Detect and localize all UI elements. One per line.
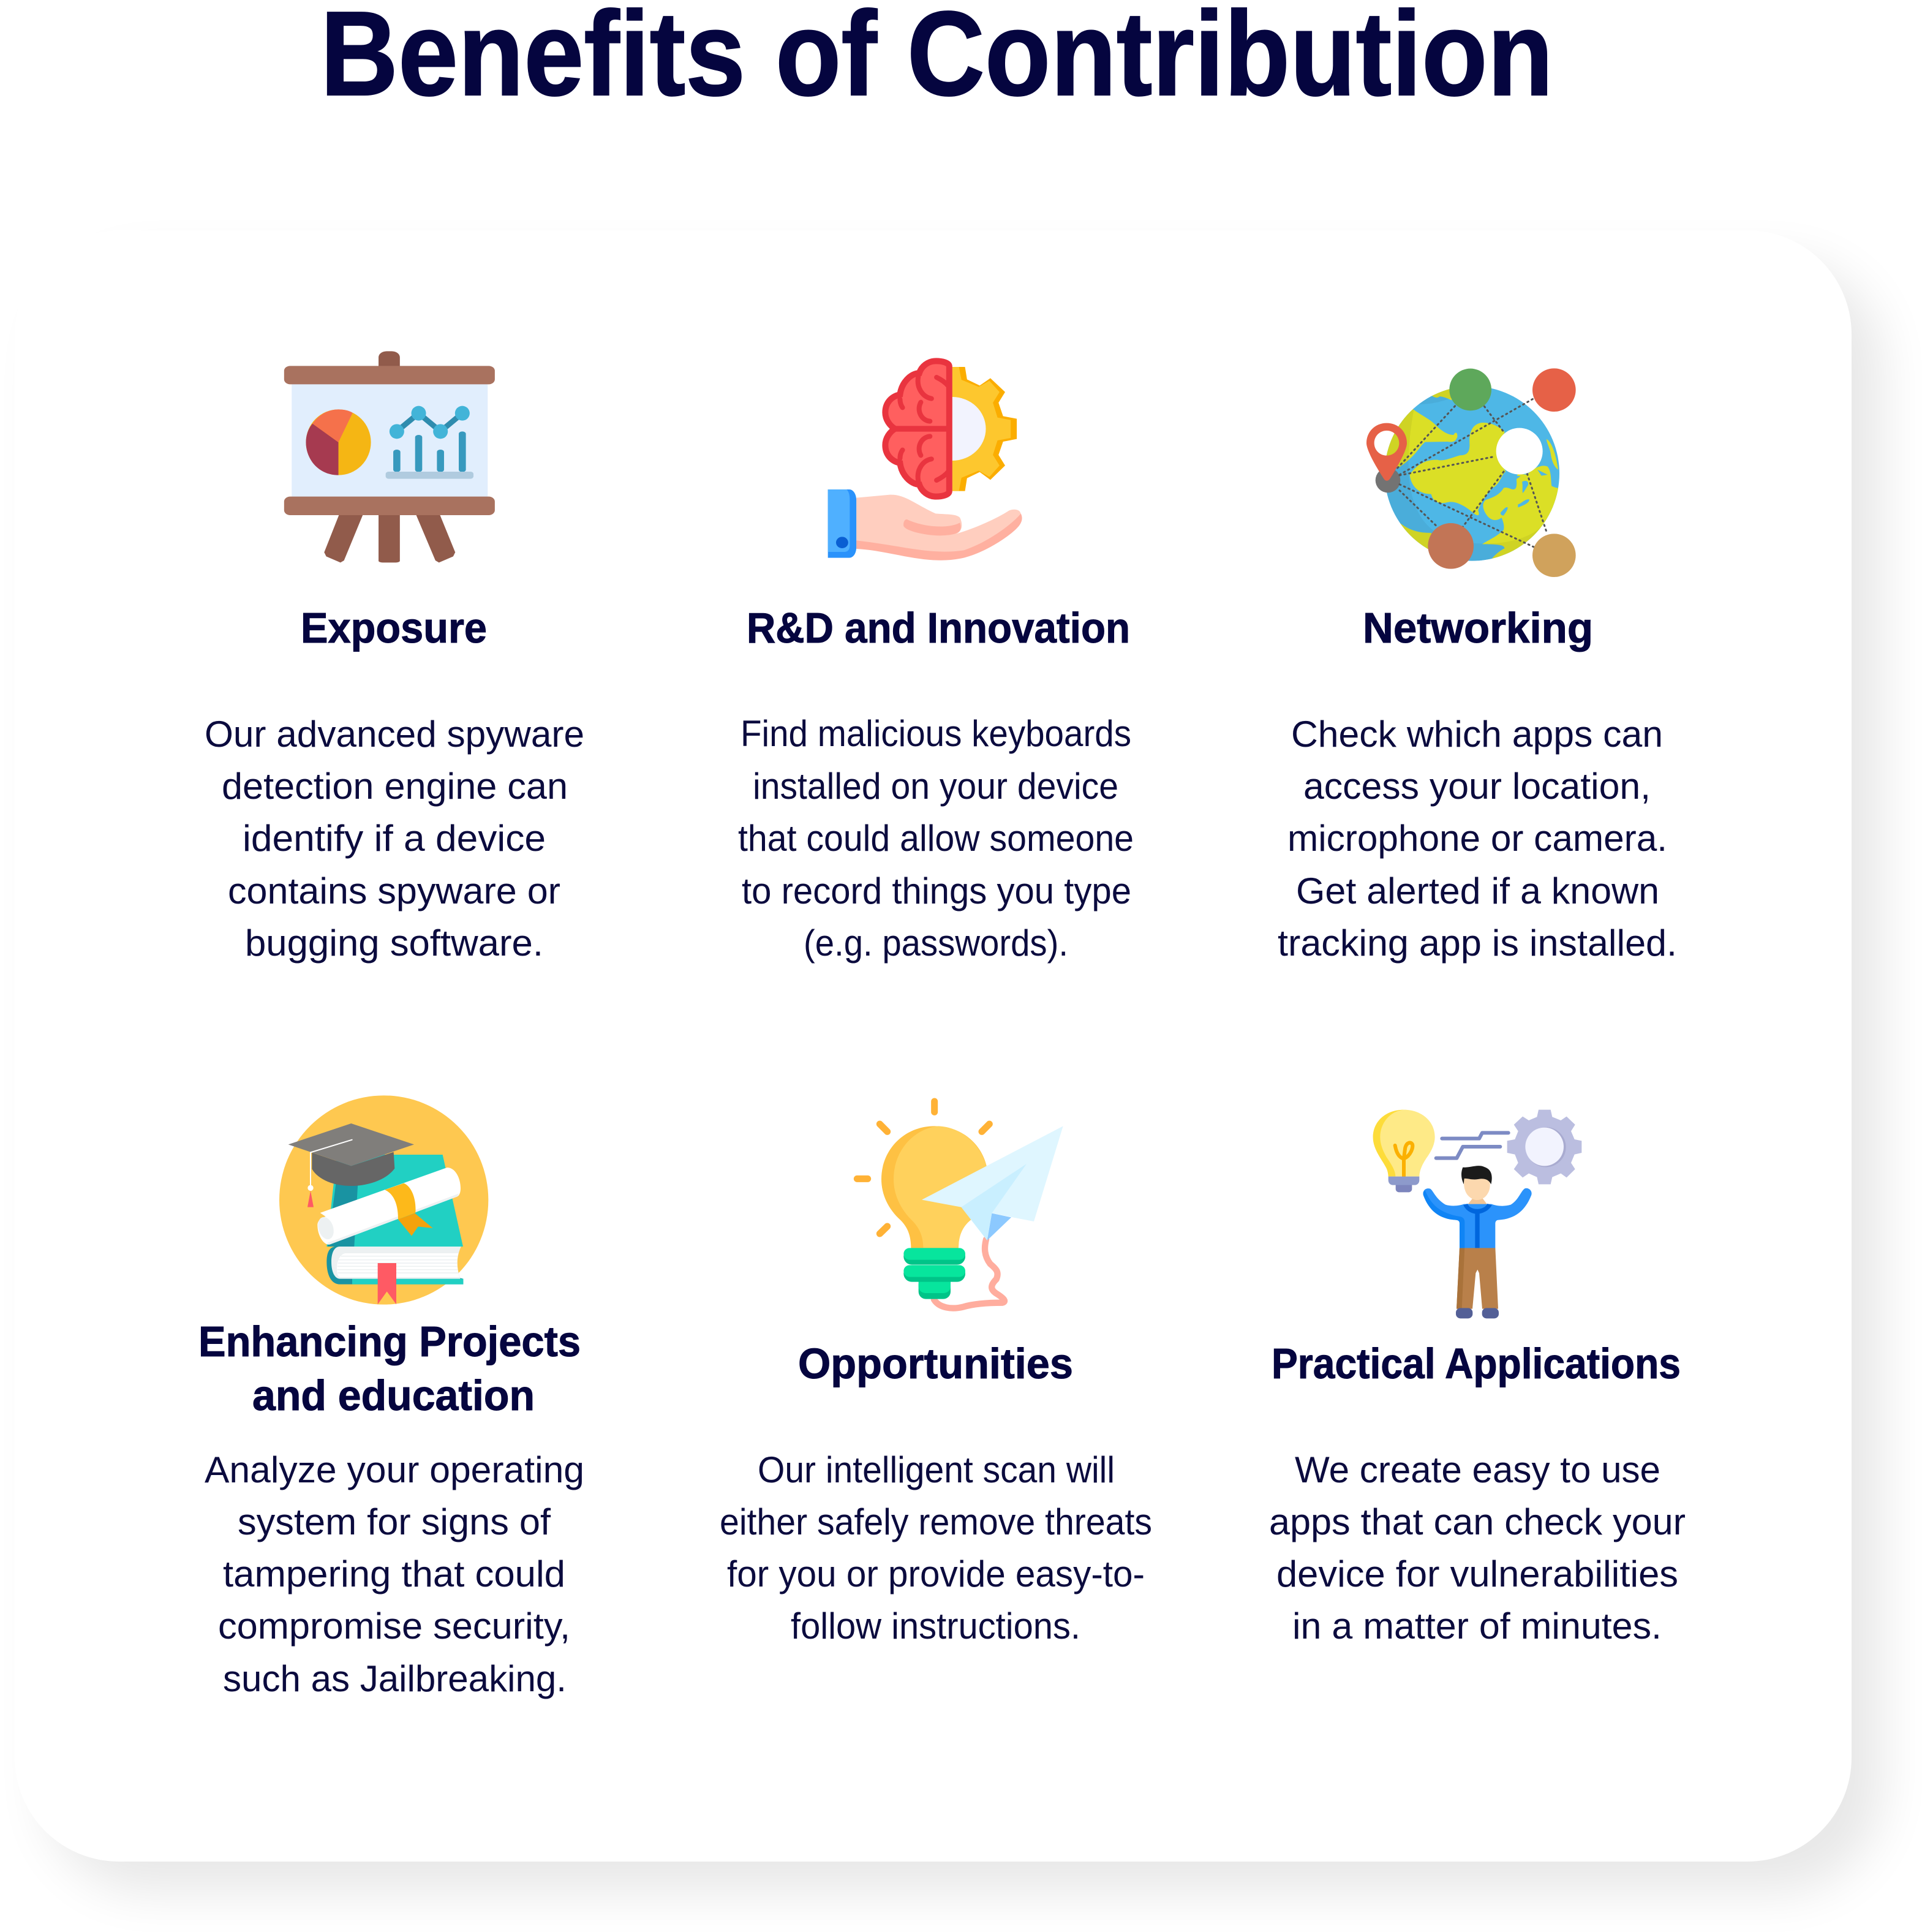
- text block: for you or provide easy-to-: [727, 1553, 1145, 1594]
- panel: Exposure: [205, 351, 584, 964]
- text block: Our intelligent scan will: [758, 1449, 1115, 1490]
- panel: Practical Applications: [1269, 1110, 1686, 1647]
- text block: in a matter of minutes.: [1292, 1606, 1662, 1647]
- heading: R&D and Innovation: [747, 604, 1130, 652]
- text block: to record things you type: [742, 870, 1131, 911]
- panel: Opportunities: [720, 1101, 1152, 1647]
- heading: and education: [252, 1372, 535, 1419]
- heading: [198, 1318, 581, 1419]
- text block: apps that can check your: [1269, 1501, 1686, 1542]
- text block: microphone or camera.: [1287, 818, 1667, 859]
- text block: Get alerted if a known: [1296, 870, 1659, 911]
- text block: identify if a device: [243, 818, 546, 859]
- text block: system for signs of: [238, 1501, 551, 1542]
- text block: that could allow someone: [738, 818, 1134, 859]
- text block: [720, 1449, 1152, 1647]
- text block: We create easy to use: [1295, 1449, 1660, 1490]
- text block: [1278, 714, 1677, 964]
- text block: [1269, 1449, 1686, 1647]
- text block: either safely remove threats: [720, 1501, 1152, 1542]
- heading: Networking: [1363, 604, 1593, 652]
- text block: [205, 714, 584, 964]
- icon: graduation cap, diploma and books: [279, 1095, 488, 1305]
- text block: such as Jailbreaking.: [223, 1658, 567, 1699]
- text block: installed on your device: [753, 766, 1118, 807]
- panel: R&D and Innovation: [738, 361, 1134, 964]
- icon: presentation easel with charts: [284, 351, 495, 562]
- icon: person with bulb and gear: [1373, 1110, 1581, 1318]
- text block: contains spyware or: [228, 870, 560, 911]
- heading: Enhancing Projects: [198, 1318, 581, 1365]
- heading: Exposure: [301, 604, 487, 652]
- heading: Opportunities: [798, 1340, 1073, 1387]
- text block: Our advanced spyware: [205, 714, 584, 755]
- panel: Networking: [1278, 368, 1677, 964]
- icon: light bulb and paper plane: [857, 1101, 1063, 1308]
- text block: compromise security,: [218, 1606, 570, 1647]
- text block: follow instructions.: [791, 1606, 1080, 1647]
- text block: Check which apps can: [1291, 714, 1663, 755]
- text block: Find malicious keyboards: [741, 713, 1131, 754]
- heading: Practical Applications: [1272, 1340, 1681, 1387]
- text block: (e.g. passwords).: [804, 923, 1068, 964]
- text block: tampering that could: [223, 1553, 565, 1594]
- text block: [738, 713, 1134, 964]
- text block: tracking app is installed.: [1278, 923, 1677, 964]
- text block: detection engine can: [222, 766, 568, 807]
- icon: brain, gear and open hand: [828, 361, 1022, 560]
- text block: Analyze your operating: [205, 1449, 584, 1490]
- text block: bugging software.: [245, 923, 543, 964]
- text block: device for vulnerabilities: [1276, 1553, 1678, 1594]
- panel: Enhancing Projects and education: [198, 1095, 584, 1699]
- text block: access your location,: [1303, 766, 1651, 807]
- icon: globe network with location pin: [1366, 368, 1576, 577]
- text block: [205, 1449, 584, 1699]
